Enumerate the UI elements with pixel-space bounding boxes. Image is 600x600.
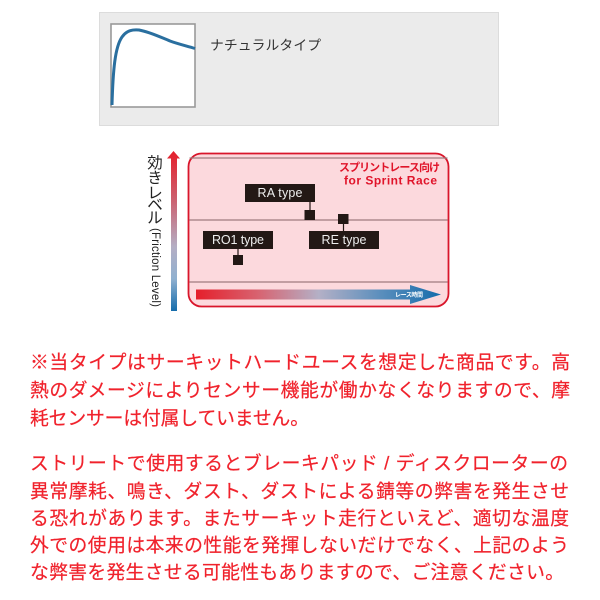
heading: for sprint race: for Sprint Race [344,174,437,188]
arrow: race time [196,285,441,304]
arrow: race time: レース時間 [395,291,423,299]
axis label: friction level [147,154,163,307]
text block: circuit use notice: ※当タイプはサーキットハードユースを想定した商品です。高 [30,352,570,372]
panel: natural type [100,12,498,126]
arrow: vertical friction scale [167,151,180,311]
heading: for sprint race: スプリントレース向け [339,160,440,174]
heading: for sprint race [339,160,440,188]
marker: RE type [309,214,379,249]
text block: street use warning: ストリートで使用するとブレーキパッド / ディスクローターの [30,452,568,474]
axis label: friction level: (Friction Level) [149,228,161,307]
text block: street use warning [30,452,569,582]
marker: RA type: RA type [258,186,303,200]
text block: street use warning: な弊害を発生させる可能性もありますので、ご注意ください。 [30,562,564,582]
text block: street use warning: 外での使用は本来の性能を発揮しないだけでなく、上記のよう [30,534,569,556]
text block: circuit use notice [30,352,570,428]
marker: RO1 type: RO1 type [212,233,264,247]
text block: circuit use notice: 耗センサーは付属していません。 [30,408,309,428]
axis label: friction level: ベ [147,197,163,214]
axis label: friction level: ル [147,210,163,227]
label: natural type: ナチュラルタイプ [210,38,321,53]
marker: RE type: RE type [322,233,367,247]
marker: RA type [245,184,315,220]
axis label: friction level: レ [147,185,163,202]
text block: street use warning: 異常摩耗、鳴き、ダスト、ダストによる錆等の弊害を発生させ [30,480,569,502]
panel: sprint race chart [188,154,448,306]
axis label: friction level: き [147,169,163,187]
axis label: friction level: 効 [147,154,163,172]
text block: street use warning: る恐れがあります。またサーキット走行といえど、適切な温度 [30,508,569,528]
text block: circuit use notice: 熱のダメージによりセンサー機能が働かなくなりますので、摩 [30,380,570,400]
marker: RO1 type [203,231,273,265]
chart: friction curve [111,24,195,107]
